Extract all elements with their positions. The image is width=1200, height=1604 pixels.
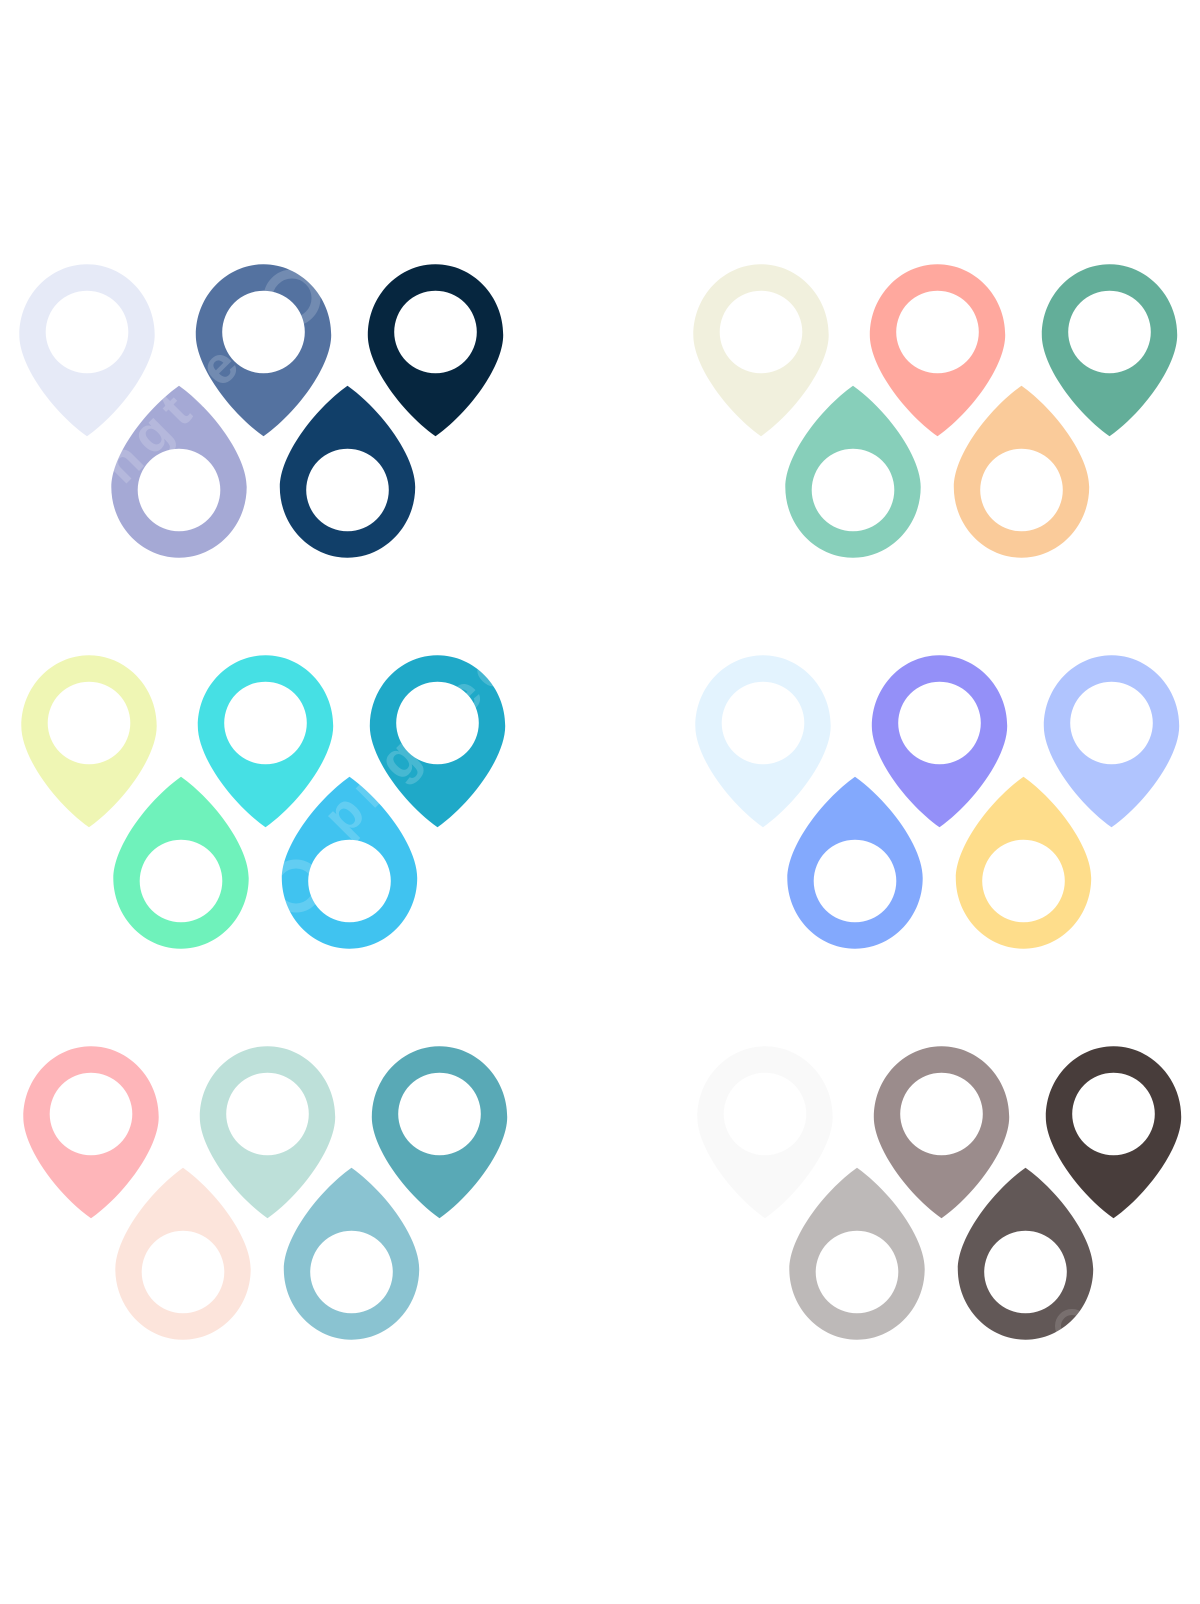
watermark text over navy set: pngtree [62, 309, 277, 523]
icon: pink pin [23, 1046, 159, 1218]
icon: spring green inverted pin [113, 777, 249, 949]
watermark text over aqua set: pngtree [312, 639, 520, 846]
icon: violet pin [872, 655, 1007, 827]
icon: lavender inverted pin [111, 386, 247, 558]
icon: pale periwinkle pin [19, 264, 155, 436]
icon: coral pin [870, 264, 1005, 436]
icon: muted teal pin [372, 1046, 507, 1218]
icon: deep blue inverted pin [280, 386, 415, 558]
icon: light periwinkle pin [1044, 655, 1179, 827]
icon: ice blue pin [695, 655, 831, 827]
panel: violet and blue pin set [695, 655, 1179, 949]
icon: charcoal brown pin [1046, 1046, 1181, 1218]
icon: butter yellow inverted pin [956, 777, 1091, 949]
icon: sky blue inverted pin [282, 777, 417, 949]
icon: pale seafoam pin [200, 1046, 335, 1218]
panel: neutral grey pin set [697, 1046, 1181, 1340]
icon: turquoise pin [198, 655, 333, 827]
icon: off-white pin [697, 1046, 833, 1218]
icon: sage green pin [1042, 264, 1177, 436]
panel: aqua pin set [21, 655, 505, 949]
icon: dark taupe inverted pin [958, 1168, 1093, 1340]
icon: mint inverted pin [785, 386, 921, 558]
icon: taupe pin [874, 1046, 1009, 1218]
panel: blush and teal pin set [23, 1046, 507, 1340]
icon: steel blue pin [196, 264, 331, 436]
watermark logo ring over dark taupe pin [1058, 1312, 1086, 1340]
icon: lime pale pin [21, 655, 157, 827]
icon: dark navy pin [368, 264, 503, 436]
panel: coral and sage pin set [693, 264, 1177, 558]
icon: dusty blue inverted pin [284, 1168, 419, 1340]
watermark logo ring over sky blue pin [274, 864, 318, 908]
icon: cornflower inverted pin [787, 777, 923, 949]
icon: pale blush inverted pin [115, 1168, 251, 1340]
icon: light grey inverted pin [789, 1168, 925, 1340]
icon: teal blue pin [370, 655, 505, 827]
watermark logo ring over steel blue pin [268, 274, 316, 322]
panel: navy pin set [19, 264, 503, 558]
icon: peach inverted pin [954, 386, 1089, 558]
icon: cream pin [693, 264, 829, 436]
